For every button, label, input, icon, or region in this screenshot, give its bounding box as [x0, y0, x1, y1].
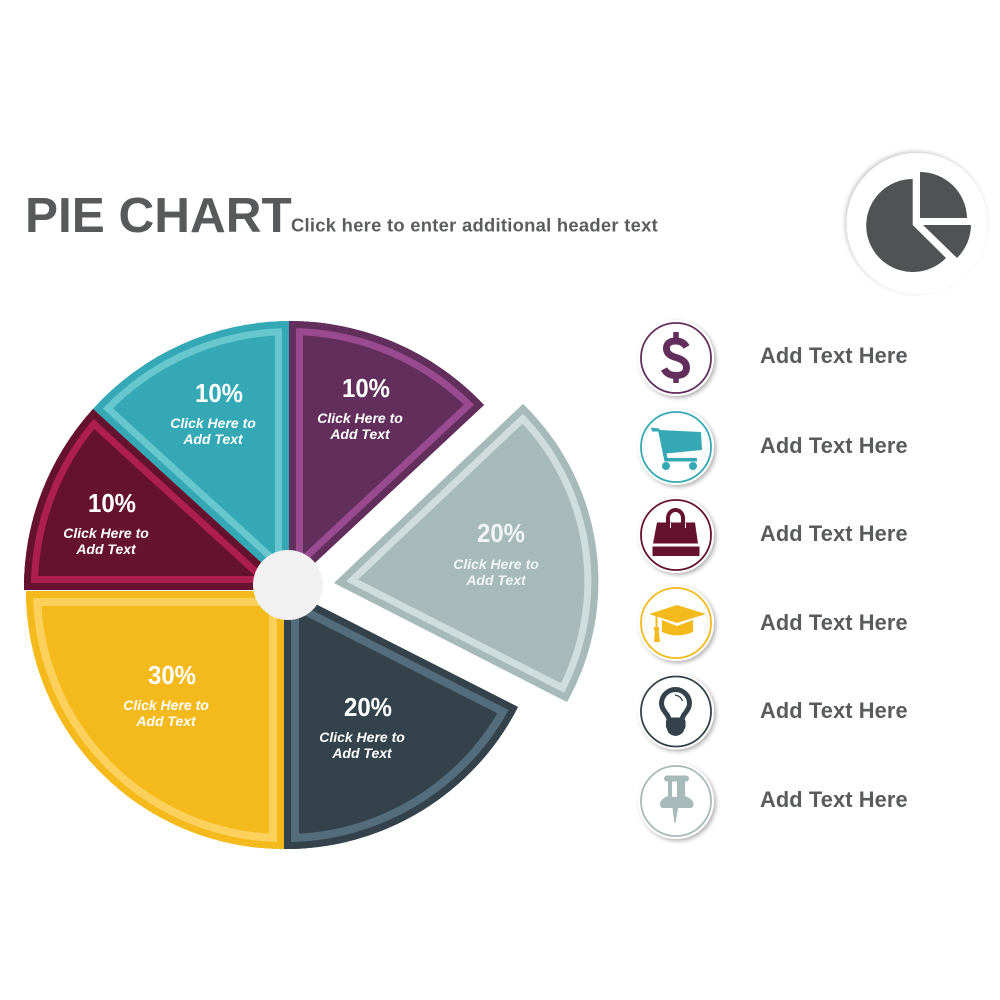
legend row 4: graduation cap	[638, 585, 908, 661]
title: PIE CHART	[25, 188, 292, 243]
purple caption: Click Here to	[317, 410, 403, 426]
legend row 3: bag	[638, 497, 908, 573]
center hub	[253, 550, 323, 620]
icon: graduation cap	[649, 605, 706, 642]
slice: teal 10%	[93, 321, 289, 588]
yellow caption: Add Text	[135, 713, 197, 729]
legend row 1: dollar	[638, 320, 908, 396]
icon: push pin	[660, 776, 694, 823]
teal caption: Click Here to	[170, 415, 256, 431]
purple percentage: 10%	[342, 375, 390, 403]
teal percentage: 10%	[195, 380, 243, 408]
legend label 3: Add Text Here	[760, 521, 908, 546]
slice: maroon 10%	[24, 409, 262, 590]
header subtitle: Click here to enter additional header text	[291, 214, 658, 236]
purple caption: Add Text	[329, 426, 391, 442]
pie chart	[24, 321, 598, 849]
slice: slate 20%	[284, 588, 518, 849]
legend label 2: Add Text Here	[760, 433, 908, 458]
legend row 2: cart	[638, 409, 908, 485]
slate caption: Click Here to	[319, 729, 405, 745]
legend label 1: Add Text Here	[760, 343, 908, 368]
maroon caption: Add Text	[75, 541, 137, 557]
icon: pie chart badge	[846, 153, 988, 294]
legend label 5: Add Text Here	[760, 698, 908, 723]
icon: shopping cart	[651, 428, 702, 470]
maroon percentage: 10%	[88, 490, 136, 518]
yellow caption: Click Here to	[123, 697, 209, 713]
icon: light bulb	[662, 690, 690, 736]
legend row 5: light bulb	[638, 674, 908, 750]
icon: shopping bag	[652, 510, 700, 556]
grey caption: Add Text	[465, 572, 527, 588]
slice: yellow 30%	[26, 591, 284, 849]
slice: purple 10%	[289, 321, 484, 587]
grey caption: Click Here to	[453, 556, 539, 572]
slate percentage: 20%	[344, 694, 392, 722]
slate caption: Add Text	[331, 745, 393, 761]
teal caption: Add Text	[182, 431, 244, 447]
yellow percentage: 30%	[148, 662, 196, 690]
legend label 6: Add Text Here	[760, 787, 908, 812]
legend label 4: Add Text Here	[760, 610, 908, 635]
slice: grey 20% exploded	[334, 404, 598, 702]
legend row 6: push pin	[638, 763, 908, 839]
grey percentage: 20%	[477, 520, 525, 548]
maroon caption: Click Here to	[63, 525, 149, 541]
icon: dollar sign	[664, 332, 686, 383]
